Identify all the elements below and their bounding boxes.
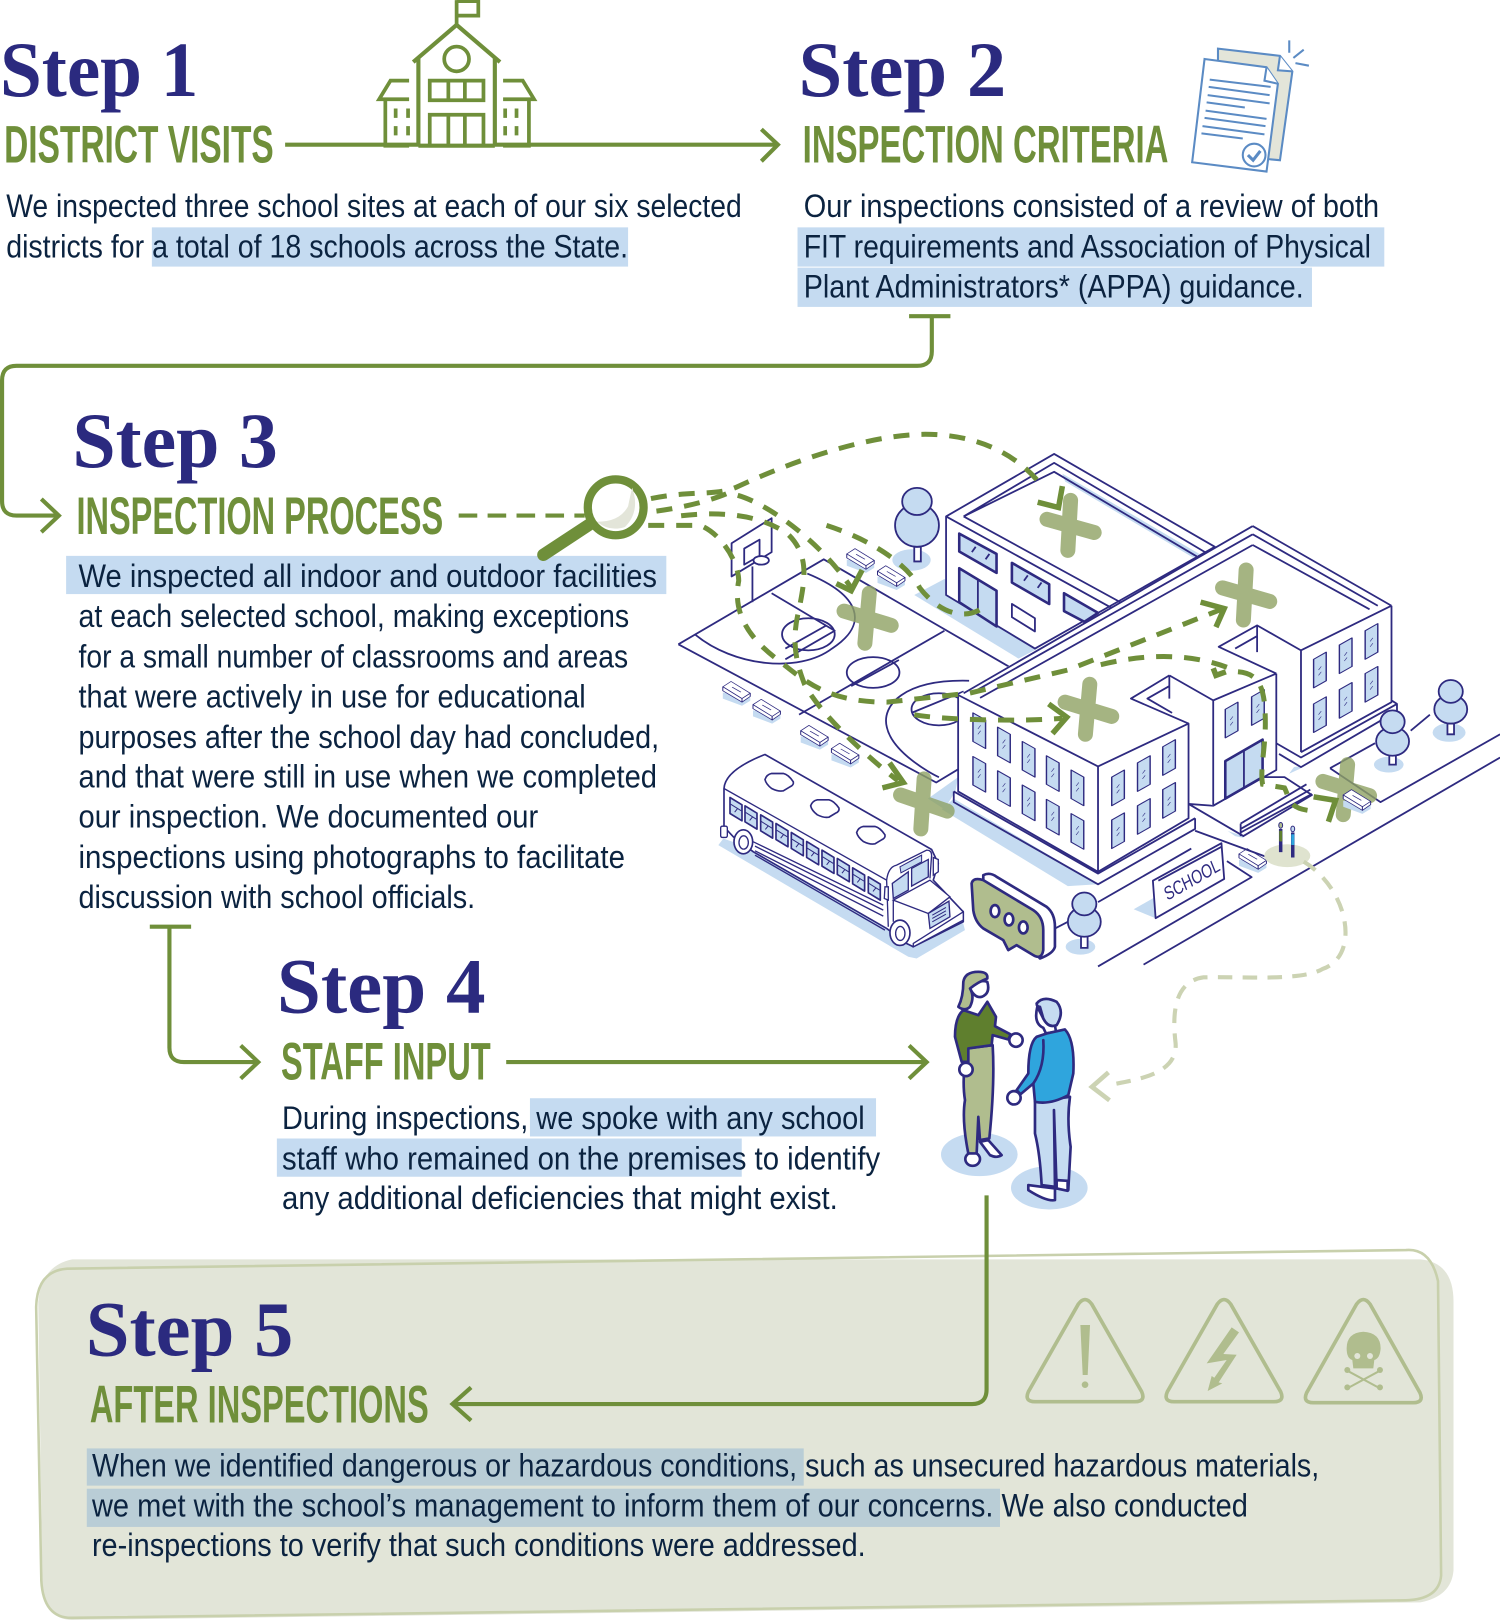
arrow: step 1 to step 2: [285, 129, 778, 161]
connector: step 2 to step 3: [2, 316, 950, 532]
body text: step 3: our inspection. We documented our: [79, 799, 539, 835]
trees: [895, 488, 1467, 948]
body text: step 2: FIT requirements and Association of Physical: [804, 228, 1371, 264]
basketball court: [678, 559, 1009, 783]
route arrowheads: [836, 486, 1336, 822]
dashed line to magnifier: [459, 514, 585, 518]
subheading: district visits: DISTRICT VISITS: [4, 115, 274, 174]
heading: step 3: Step 3: [72, 397, 278, 484]
illustration: isometric school campus: [648, 434, 1500, 966]
ground shadows: [892, 549, 1466, 955]
panel: step 3 inspection process: [66, 397, 666, 915]
subheading: inspection criteria: INSPECTION CRITERIA: [803, 115, 1168, 174]
building: main block roof and right wing: [958, 526, 1397, 836]
school bus: [718, 754, 965, 958]
subheading: staff input: STAFF INPUT: [281, 1033, 491, 1092]
icon: toxic hazard triangle: [1305, 1300, 1421, 1403]
panel: step 1 district visits: [0, 0, 778, 267]
panel: step 5 after inspections background: [36, 1250, 1454, 1620]
body text: step 4: staff who remained on the premises to identify: [282, 1141, 880, 1177]
body text: step 5: When we identified dangerous or hazardous conditions, such as unsecured hazardous materials,: [92, 1447, 1319, 1483]
icon: school building: [379, 0, 534, 146]
dashed inspection routes: [648, 434, 1315, 811]
body text: step 1: districts for a total of 18 schools across the State.: [6, 228, 628, 264]
body text: step 2: Plant Administrators* (APPA) guidance.: [804, 269, 1304, 305]
tiny inspector figures: [1264, 823, 1310, 867]
icon: warning triangle: [1027, 1300, 1143, 1402]
building: entrance tower and steps: [1131, 674, 1312, 836]
body text: step 2: [804, 188, 1379, 305]
highlight: indoor and outdoor: [66, 556, 666, 594]
heading: step 1: Step 1: [0, 26, 198, 113]
woman: [941, 972, 1023, 1176]
icon: documents with check: [1192, 40, 1309, 172]
body text: step 1: We inspected three school sites at each of our six selected: [6, 188, 742, 224]
highlight: hazardous conditions: [87, 1448, 1000, 1527]
body text: step 5: we met with the school’s management to inform them of our concerns. We also conducted: [91, 1488, 1248, 1524]
arrow: people to step 5: [452, 1195, 987, 1421]
body text: step 1: [6, 188, 742, 264]
body text: step 5: [91, 1447, 1319, 1563]
body text: step 5: re-inspections to verify that such conditions were addressed.: [92, 1527, 866, 1563]
road and sidewalk lines: [1054, 715, 1500, 966]
arrow: staff input to people: [506, 1046, 927, 1079]
heading: step 5: Step 5: [86, 1285, 293, 1372]
highlight: total schools: [152, 227, 628, 267]
heading: step 2: Step 2: [799, 26, 1006, 113]
panel: step 2 inspection criteria: [2, 26, 1384, 532]
basketball hoop: [732, 518, 772, 602]
body text: step 3: purposes after the school day had concluded,: [79, 719, 659, 755]
panel: step 4 staff input: [150, 927, 927, 1216]
body text: step 4: During inspections, we spoke with any school: [282, 1100, 865, 1136]
benches: [723, 549, 1266, 873]
building: rear wing: [946, 454, 1215, 649]
connector: step 3 to step 4: [150, 927, 258, 1079]
inspection markers: [844, 500, 1370, 829]
body text: step 3: that were actively in use for educational: [79, 679, 586, 715]
body text: step 3: discussion with school officials.: [79, 879, 475, 915]
body text: step 3: [79, 558, 659, 915]
icon: electric hazard triangle: [1166, 1300, 1282, 1402]
building: front classroom block: [954, 695, 1195, 884]
body text: step 4: any additional deficiencies that might exist.: [282, 1180, 838, 1216]
man: [1007, 999, 1088, 1209]
heading: step 4: Step 4: [277, 942, 486, 1029]
dashed path from tiny figures to people: [1092, 862, 1346, 1100]
panel: step 5 after inspections content: [86, 1195, 1421, 1563]
highlight: spoke with staff: [277, 1098, 876, 1177]
highlight: criteria: [798, 227, 1384, 307]
body text: step 4: [282, 1100, 880, 1216]
body text: step 3: and that were still in use when we completed: [79, 758, 657, 794]
illustration: two people talking: [941, 972, 1088, 1209]
sign label: SCHOOL: [1161, 854, 1223, 905]
icons: hazard triangles: [1027, 1300, 1421, 1403]
icon: magnifying glass: [543, 479, 644, 555]
school sign board: [1153, 843, 1224, 918]
icon: speech bubble: [972, 874, 1055, 958]
subheading: inspection process: INSPECTION PROCESS: [76, 487, 443, 546]
body text: step 3: for a small number of classrooms and areas: [79, 638, 628, 674]
body text: step 3: at each selected school, making exceptions: [79, 598, 629, 634]
subheading: after inspections: AFTER INSPECTIONS: [90, 1376, 429, 1435]
body text: step 2: Our inspections consisted of a review of both: [804, 188, 1379, 224]
body text: step 3: We inspected all indoor and outdoor facilities: [79, 558, 657, 594]
body text: step 3: inspections using photographs to facilitate: [79, 839, 625, 875]
bench near entrance: [1343, 790, 1371, 814]
